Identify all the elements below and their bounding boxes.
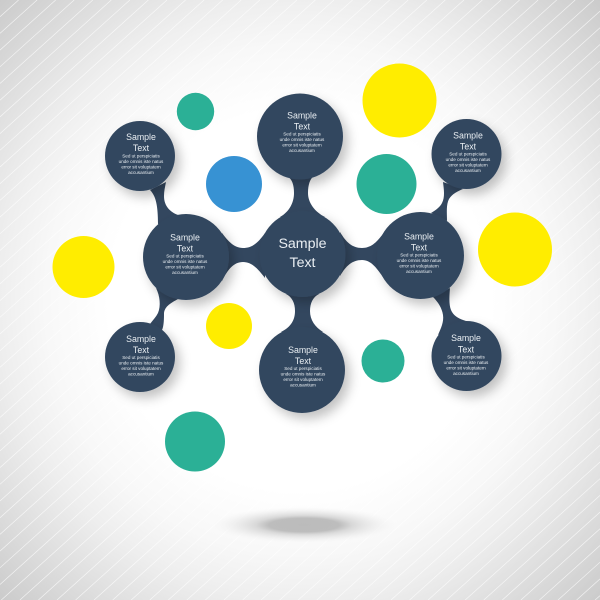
node: top right: accusantium — [455, 168, 481, 173]
connector: centre to top — [280, 177, 325, 217]
node: bottom left: accusantium — [128, 372, 154, 376]
connector: top left to left mid — [150, 182, 180, 224]
node: top right: Sample — [453, 130, 483, 140]
node: bottom centre: Sample — [288, 345, 318, 355]
node: left mid: Sed ut perspiciatis — [166, 254, 204, 258]
node: top left: accusantium — [128, 170, 154, 175]
node: centre: Text — [289, 255, 316, 271]
node: centre — [260, 211, 346, 297]
node: bottom left — [105, 322, 175, 392]
node: top right: error sit voluptatem — [448, 162, 488, 168]
node: top centre: Sed ut perspiciatis — [283, 132, 321, 136]
connector: right mid to top right — [431, 182, 463, 221]
node: left mid: Text — [177, 244, 194, 254]
node: bottom right: unde omnis iste natus — [444, 360, 489, 365]
connector: right mid to bottom right — [433, 288, 466, 335]
node: left mid: unde omnis iste natus — [163, 259, 208, 264]
node: bottom centre: accusantium — [290, 382, 316, 388]
circle: blue — [206, 156, 262, 212]
node: bottom right: accusantium — [453, 371, 479, 376]
node: right mid: error sit voluptatem — [399, 264, 439, 268]
node: top left: Sed ut perspiciatis — [122, 154, 160, 158]
circle: yellow left — [52, 236, 114, 298]
node: top left: Sample — [126, 132, 156, 142]
node: centre: Sample — [278, 236, 327, 252]
circle: yellow right — [478, 212, 552, 286]
node: bottom left: Sed ut perspiciatis — [122, 355, 160, 360]
node: right mid: Sed ut perspiciatis — [400, 252, 438, 258]
node: right mid: Sample — [404, 232, 434, 242]
circle: teal centre right — [356, 154, 416, 214]
node: top right: unde omnis iste natus — [446, 157, 491, 162]
node: right mid — [377, 212, 464, 299]
connector: left mid to bottom left — [150, 288, 178, 330]
node: bottom right: Sed ut perspiciatis — [447, 354, 485, 360]
node: left mid: Sample — [170, 232, 200, 242]
node: bottom right: Text — [458, 344, 475, 354]
node: left mid: error sit voluptatem — [165, 264, 205, 270]
metaball connectors — [150, 177, 466, 335]
coloured circles — [52, 64, 552, 472]
node: top centre: Text — [294, 122, 311, 132]
node: top right: Sed ut perspiciatis — [449, 152, 487, 156]
node: top centre: accusantium — [289, 148, 315, 153]
node: bottom right: error sit voluptatem — [446, 366, 486, 370]
floor shadow — [212, 507, 396, 543]
node: top centre: Sample — [287, 110, 317, 120]
node: bottom centre: error sit voluptatem — [283, 377, 323, 382]
circle: teal top left — [177, 93, 214, 130]
node: top centre: unde omnis iste natus — [280, 137, 325, 142]
node: bottom centre — [259, 327, 345, 413]
node: right mid: accusantium — [406, 269, 432, 274]
node: bottom right — [432, 321, 502, 391]
connector: centre to right mid — [340, 231, 385, 280]
circle: teal right bottom — [362, 340, 404, 382]
node: top right: Text — [460, 142, 477, 152]
node: top centre: error sit voluptatem — [282, 142, 322, 148]
node: top left: error sit voluptatem — [121, 164, 161, 170]
circle: yellow centre bottom — [206, 303, 252, 349]
node: left mid — [143, 214, 229, 300]
node: top right — [432, 119, 502, 189]
node: bottom centre: Sed ut perspiciatis — [284, 366, 322, 371]
node: top left: unde omnis iste natus — [119, 159, 164, 164]
node: bottom centre: Text — [295, 356, 312, 366]
node: bottom centre: unde omnis iste natus — [281, 372, 326, 376]
node: bottom left: Sample — [126, 334, 156, 344]
connector: centre to left mid — [222, 233, 265, 281]
node: right mid: unde omnis iste natus — [397, 258, 442, 263]
node: right mid: Text — [411, 242, 428, 252]
node: bottom left: unde omnis iste natus — [119, 360, 164, 366]
node: top left: Text — [133, 143, 150, 153]
node: bottom left: error sit voluptatem — [121, 366, 161, 371]
node: bottom left: Text — [133, 345, 150, 355]
node: top left — [105, 121, 175, 191]
node: bottom right: Sample — [451, 333, 481, 343]
circle: yellow top — [362, 64, 436, 138]
node: left mid: accusantium — [172, 270, 198, 275]
connector: centre to bottom — [281, 294, 323, 332]
node: top centre — [257, 94, 343, 180]
circle: teal bottom — [165, 412, 225, 472]
